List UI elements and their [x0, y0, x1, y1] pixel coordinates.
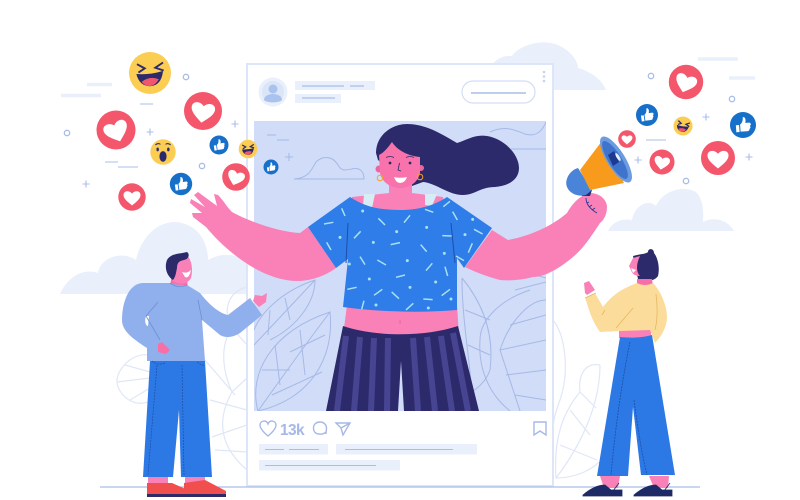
trouser stitching [148, 361, 205, 475]
menu dots [543, 71, 545, 82]
icon: send [336, 423, 350, 435]
post photo background [254, 121, 546, 411]
icon: heart top [184, 92, 222, 130]
decorative lines right [698, 59, 755, 78]
icon: heart middle [222, 163, 250, 191]
woman trousers [597, 335, 675, 476]
man smile [182, 270, 191, 277]
man in blue sweater [122, 252, 267, 497]
cloud: right [608, 189, 734, 231]
cloud: left [60, 222, 247, 294]
emoji: surprised [150, 139, 176, 165]
megaphone rear [566, 168, 592, 196]
icon: heart lower right [701, 141, 735, 175]
woman sweater [585, 283, 667, 343]
man right shoe [184, 480, 226, 494]
follow button [462, 81, 535, 103]
man face [172, 256, 192, 284]
face [379, 142, 420, 188]
woman shoes [583, 483, 672, 496]
icon: like lower [170, 173, 192, 195]
woman in yellow sweater [583, 249, 675, 496]
panel: social post card [247, 64, 553, 486]
navel [399, 320, 401, 324]
icon: like left [636, 104, 658, 126]
shirt sleeve seams [346, 223, 455, 263]
icon: like right [730, 112, 756, 138]
leaves right [462, 278, 492, 391]
icon: heart near megaphone [618, 130, 636, 148]
photo decorations: clouds and leaves [254, 122, 546, 411]
woman hair [633, 249, 659, 281]
man hair [166, 252, 189, 280]
woman trouser stitching [611, 342, 647, 475]
earrings [377, 174, 423, 181]
reaction icons: left group [61, 52, 278, 211]
leaves left [254, 280, 315, 345]
man left shoe [147, 483, 190, 494]
bell rim [594, 132, 638, 187]
likes count: 13k [280, 422, 305, 439]
main woman influencer [190, 124, 607, 411]
man hand on hip [158, 342, 170, 354]
woman hand [584, 281, 595, 295]
woman legs [600, 476, 669, 488]
striped pants [326, 326, 479, 411]
man raised hand [253, 293, 267, 307]
plus marks left [82, 120, 238, 188]
shirt [308, 197, 492, 312]
background leaves: left outside [117, 287, 247, 470]
right arm and fist [465, 193, 607, 280]
shirt confetti pattern [324, 201, 483, 310]
caption placeholder lines [259, 444, 477, 470]
icon: bookmark [534, 422, 546, 435]
orange cone [580, 141, 624, 190]
facial features [386, 156, 414, 183]
woman neck [637, 279, 653, 286]
decorative lines left [61, 84, 112, 96]
sweater fold lines [585, 293, 657, 330]
ground line [100, 486, 700, 488]
cloud: top right behind post [480, 42, 606, 90]
man neck [170, 272, 188, 288]
illustration: social media influencer [60, 42, 756, 497]
man trousers [143, 361, 212, 477]
rings left [64, 74, 205, 169]
thin accent line right [646, 139, 666, 141]
handle [580, 190, 592, 196]
emoji: laughing right [671, 114, 695, 138]
woman face [629, 256, 640, 276]
man sweater [122, 283, 262, 361]
megaphone driver [608, 151, 619, 166]
man shoe soles [147, 494, 226, 497]
icon: like heart [260, 421, 276, 436]
neck and chest [350, 178, 447, 215]
icon: heart bottom [118, 183, 146, 211]
icon: heart top right [669, 65, 703, 99]
top straps [363, 194, 437, 208]
woman midriff [619, 328, 651, 338]
icon: comment [314, 422, 326, 434]
icon: like on photo [264, 160, 278, 174]
background leaves: right outside [553, 320, 605, 478]
emoji: small laughing [239, 140, 257, 158]
reaction icons: right group [618, 59, 756, 184]
ear right [418, 165, 424, 171]
thin accent lines left [105, 104, 153, 167]
icon: avatar [258, 78, 288, 106]
sweater arm gap [145, 316, 149, 326]
ear left [376, 166, 382, 172]
icon: heart left [96, 110, 136, 150]
icon: like top [210, 136, 228, 154]
icon: megaphone [566, 132, 638, 196]
left arm and hand [190, 192, 336, 281]
rings right [648, 73, 735, 184]
woman smile [631, 268, 636, 273]
post action icons [260, 421, 546, 439]
username placeholder lines [295, 81, 375, 103]
plus marks right [634, 114, 752, 164]
man sweater seams [146, 283, 202, 340]
hair back [376, 124, 519, 195]
midriff [343, 305, 459, 336]
man socks [148, 477, 205, 484]
emoji: big laughing [129, 52, 171, 94]
icon: heart lower middle [650, 150, 674, 174]
fist fingers [586, 198, 597, 213]
